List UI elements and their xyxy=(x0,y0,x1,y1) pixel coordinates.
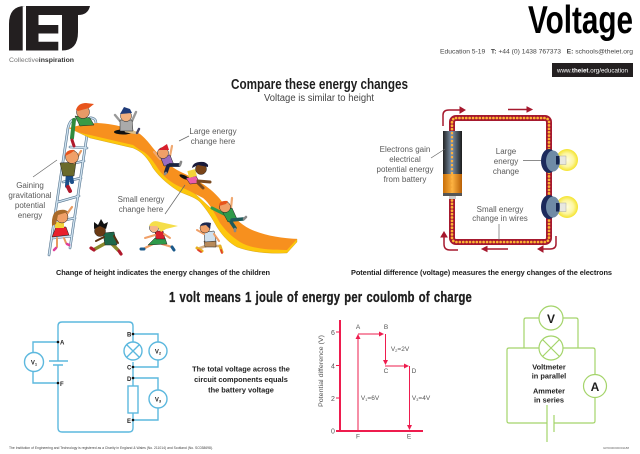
text: voltmeter in parallel: Voltmeter xyxy=(532,362,566,372)
label: small energy change here xyxy=(118,185,185,214)
voltmeter V2: 2 xyxy=(159,350,162,356)
lamp xyxy=(124,342,142,360)
text: voltmeter in parallel xyxy=(532,362,566,380)
text: total voltage: the battery voltage xyxy=(208,386,274,394)
ladder xyxy=(49,118,96,255)
ammeter: A xyxy=(591,380,600,394)
text: ammeter in series: in series xyxy=(534,396,564,404)
child bottom of ladder xyxy=(52,207,72,250)
voltmeter V3 xyxy=(133,378,167,420)
point labels: V xyxy=(412,395,416,402)
label: large energy change: Large xyxy=(496,147,517,156)
node points and labels: C xyxy=(127,366,132,372)
subheading: Voltage is similar to height xyxy=(264,93,374,104)
circuit diagram: blue xyxy=(24,322,167,432)
heading: compare energy changes: Compare these energy changes xyxy=(231,77,408,93)
label: gaining gravitational potential energy: potential xyxy=(15,201,45,210)
point labels: 3 xyxy=(416,397,419,402)
label: small energy change in wires: change in wires xyxy=(472,214,528,223)
label: electrons gain energy: potential energy xyxy=(377,165,433,174)
website badge: www.theiet.org/education xyxy=(556,68,628,74)
child sliding, purple xyxy=(154,144,181,174)
child running, yellow hair xyxy=(141,221,178,250)
label: gaining gravitational potential energy: Gaining xyxy=(16,181,44,190)
label: large energy change here xyxy=(179,127,237,146)
label: small energy change in wires xyxy=(472,205,528,240)
slide xyxy=(69,123,297,253)
point labels: A xyxy=(356,324,361,331)
point labels: D xyxy=(412,368,417,375)
node points and labels: E xyxy=(127,419,131,425)
child on ladder top xyxy=(72,103,94,146)
voltmeter V1: V xyxy=(31,360,35,366)
child running, green shirt xyxy=(91,219,121,254)
label: electrons gain energy xyxy=(377,145,445,184)
point labels: =4V xyxy=(418,395,431,402)
voltmeter: V xyxy=(547,312,555,326)
arrows xyxy=(441,107,556,252)
resistor xyxy=(128,386,138,413)
footer: code: GP0000000001188 xyxy=(603,446,630,450)
voltmeter V3: 3 xyxy=(159,398,162,404)
child sliding, pink xyxy=(179,162,210,188)
caption: potential difference: Potential difference (voltage) measures the energy changes of the electrons xyxy=(351,268,612,277)
point labels: V xyxy=(361,395,365,402)
point labels: =6V xyxy=(367,395,380,402)
point labels: C xyxy=(384,368,389,375)
child climbing xyxy=(60,150,81,191)
child sliding, green xyxy=(212,198,246,231)
text: ammeter in series xyxy=(533,386,565,404)
point labels xyxy=(356,324,431,440)
point labels: 2 xyxy=(395,348,398,353)
node points and labels: F xyxy=(60,382,64,388)
label: large energy change: change xyxy=(493,167,520,176)
label: gaining gravitational potential energy: gravitational xyxy=(8,191,52,200)
logo: IET xyxy=(9,6,90,64)
axes xyxy=(336,320,423,432)
node points and labels: B xyxy=(127,332,132,338)
node points and labels xyxy=(57,332,134,425)
point labels: B xyxy=(384,324,388,331)
text: total voltage xyxy=(192,364,290,394)
child running, white shirt xyxy=(197,222,222,253)
child sliding, grey top xyxy=(114,107,139,134)
point labels: E xyxy=(407,434,412,440)
label: electrons gain energy: electrical xyxy=(389,155,421,164)
logo strapline: Collective inspiration xyxy=(9,57,74,64)
website badge xyxy=(552,63,633,77)
node points and labels: D xyxy=(127,377,132,383)
contact line: Education 5-19 T: +44 (0) 1438 767373 E: schools@theiet.org xyxy=(440,48,634,56)
tick labels xyxy=(331,330,335,436)
battery xyxy=(443,131,462,199)
graph: potential difference xyxy=(318,320,431,440)
footer: charity note: The Institution of Engineering and Technology is registered as a Charity in England & Wales (No. 211014) and Scotland (No. SC038698). xyxy=(9,446,213,450)
label: small energy change here: Small energy xyxy=(118,195,164,204)
text: ammeter in series: Ammeter xyxy=(533,386,565,396)
point labels: F xyxy=(356,434,360,440)
tick labels: 6 xyxy=(331,330,335,337)
battery symbol xyxy=(49,361,68,365)
tick labels: 4 xyxy=(331,364,335,370)
voltmeter V3: V xyxy=(155,398,159,404)
label: gaining gravitational potential energy: energy xyxy=(18,211,42,220)
lamp xyxy=(539,336,563,360)
label: large energy change: energy xyxy=(494,157,518,166)
voltmeter V2: V xyxy=(155,350,159,356)
voltmeter V1: 1 xyxy=(35,362,38,366)
label: large energy change here: Large energy xyxy=(189,127,237,136)
voltmeter V2 xyxy=(133,334,167,367)
tick labels: 0 xyxy=(331,428,335,436)
voltmeter V1 xyxy=(24,342,58,383)
electron circuit xyxy=(441,107,578,252)
bulb lower xyxy=(541,195,578,219)
heading: 1 volt means: 1 volt means 1 joule of energy per coulomb of charge xyxy=(169,289,472,306)
label: electrons gain energy: Electrons gain xyxy=(380,145,430,154)
label: small energy change here: change here xyxy=(119,205,164,214)
label: gaining gravitational potential energy xyxy=(8,160,57,220)
slide illustration xyxy=(49,103,297,255)
label: small energy change in wires: Small energy xyxy=(477,205,523,214)
point labels: V xyxy=(391,346,395,353)
point labels: 1 xyxy=(365,397,368,402)
wire loop xyxy=(452,118,549,242)
point labels: =2V xyxy=(397,346,410,353)
label: electrons gain energy: from battery xyxy=(384,175,426,184)
axis label: Potential difference (V) xyxy=(318,335,325,407)
circuit diagram: green xyxy=(507,306,606,442)
battery symbol xyxy=(547,405,554,442)
caption: change of height: Change of height indicates the energy changes of the children xyxy=(56,268,270,277)
label: large energy change xyxy=(493,147,541,176)
step lines xyxy=(358,334,410,431)
text: total voltage: The total voltage across the xyxy=(192,364,290,374)
bulb upper xyxy=(541,149,578,173)
label: large energy change here: change here xyxy=(191,137,236,146)
text: total voltage: circuit components equals xyxy=(194,375,288,384)
node points and labels: A xyxy=(60,340,65,346)
text: voltmeter in parallel: in parallel xyxy=(532,372,566,380)
tick labels: 2 xyxy=(331,396,335,403)
